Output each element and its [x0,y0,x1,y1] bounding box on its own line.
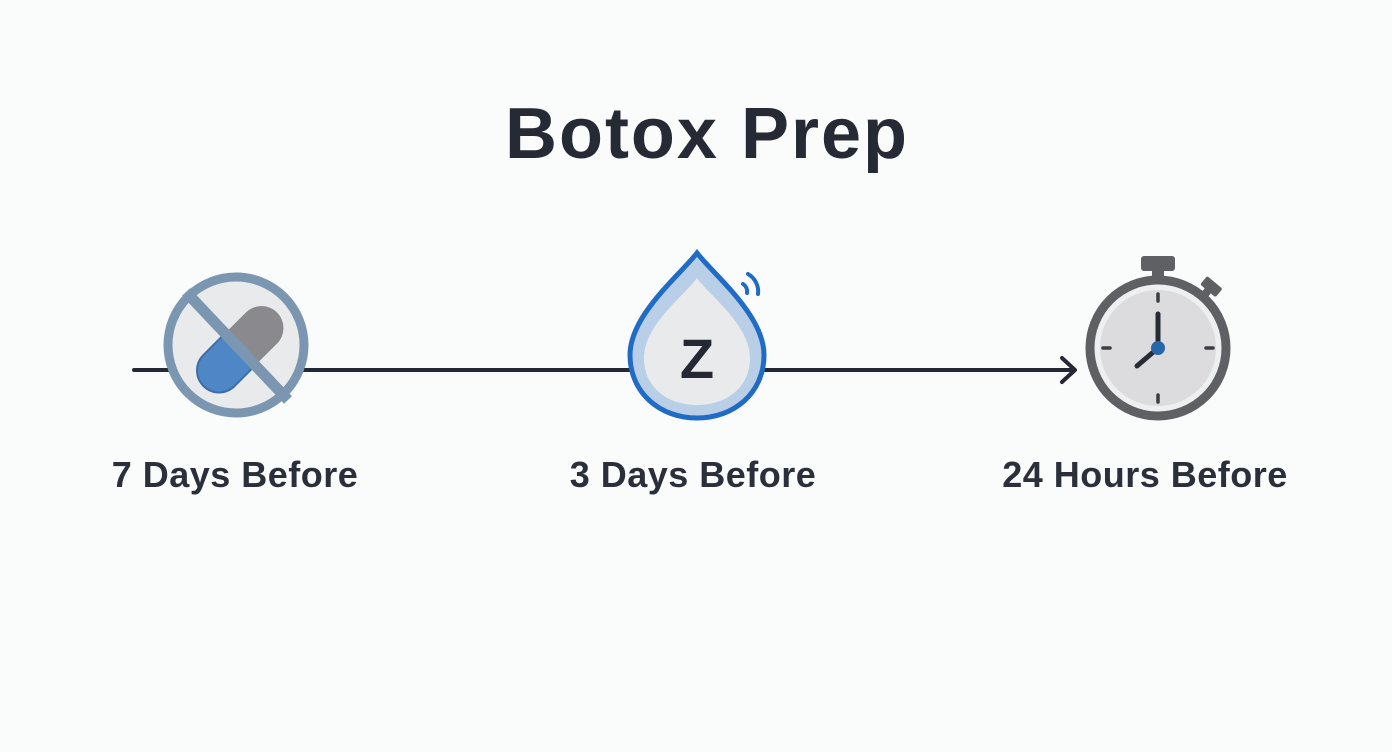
icon: drop with Z [630,253,764,418]
icon: no pills [168,277,304,413]
icon: stopwatch [1090,256,1226,416]
title: Botox Prep [505,94,909,174]
label: 7 days: 7 Days Before [112,454,358,495]
arrow: timeline [134,358,1075,382]
label: 3 days: 3 Days Before [570,454,816,495]
pill halves [188,297,293,402]
icon: drop with Z: Z [680,327,714,390]
label: 24 hours: 24 Hours Before [1002,454,1288,495]
